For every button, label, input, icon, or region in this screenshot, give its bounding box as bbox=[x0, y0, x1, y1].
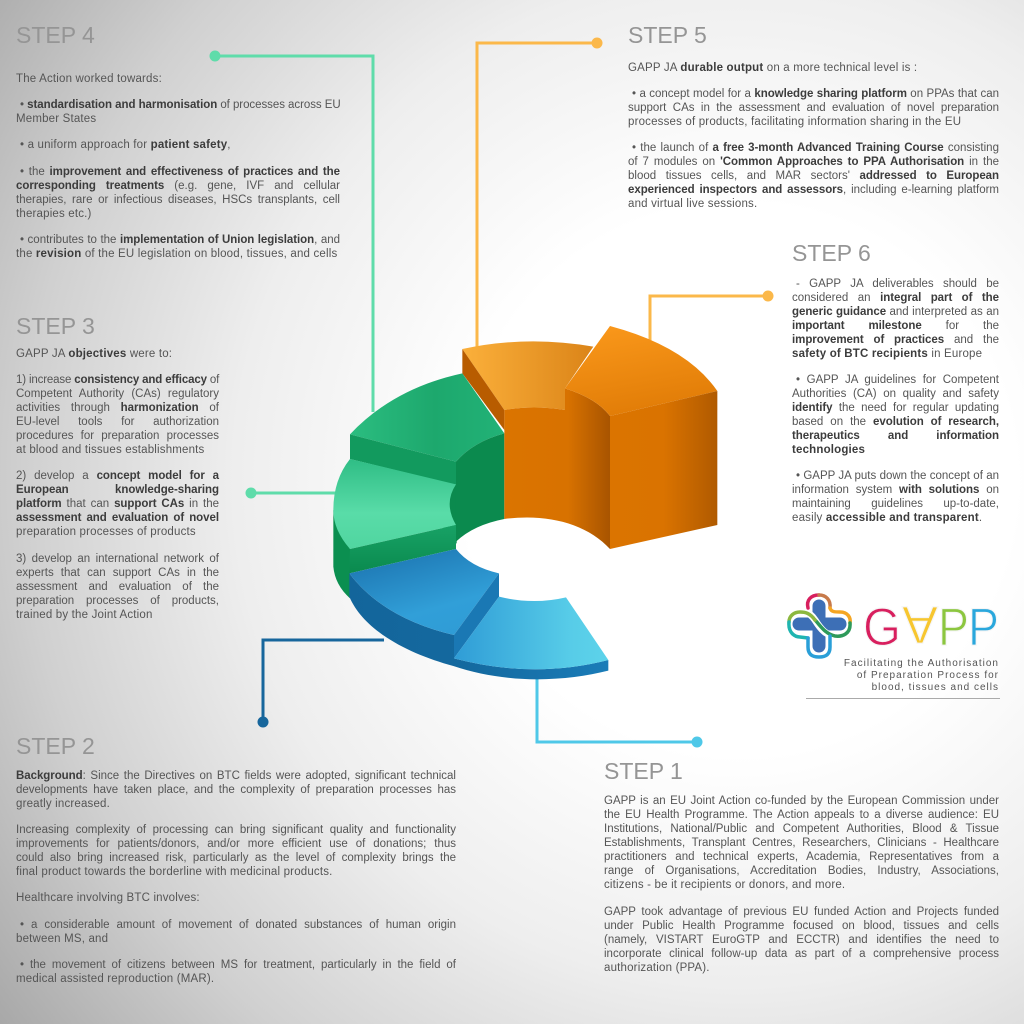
step 6 text: information system with solutions on bbox=[792, 484, 999, 496]
step 4 text: therapies etc.) bbox=[16, 208, 92, 220]
step 3 text: preparation processes of products bbox=[16, 526, 196, 538]
segment: step 6 orange bbox=[504, 326, 717, 549]
step 3 text: GAPP JA objectives were to: bbox=[16, 348, 172, 360]
step 6 text: • GAPP JA puts down the concept of an bbox=[796, 470, 999, 482]
step 3 text: experts that can support CAs in the bbox=[16, 567, 219, 579]
step 1 text: Establishments, Transplant Centres, Researchers, Clinicians - Healthcare bbox=[604, 837, 999, 849]
logo block bbox=[787, 593, 1000, 699]
step 6 text: important milestone for the bbox=[792, 320, 999, 332]
step 5 text: blood tissues cells, and MAR sectors' addressed to European bbox=[628, 170, 999, 182]
step 3 text: European knowledge-sharing bbox=[16, 484, 219, 496]
step 4 text: • the improvement and effectiveness of practices and the bbox=[20, 166, 340, 178]
tagline bbox=[844, 658, 999, 693]
connector: step 6 bbox=[650, 290, 774, 345]
step 4 text: • a uniform approach for patient safety, bbox=[20, 139, 231, 151]
step 3 text: 2) develop a concept model for a bbox=[16, 470, 219, 482]
tagline: blood, tissues and cells bbox=[872, 682, 999, 693]
step 3 text: platform that can support CAs in the bbox=[16, 498, 219, 510]
step 2 text: between MS, and bbox=[16, 933, 108, 945]
step 5 text: GAPP JA durable output on a more technical level is : bbox=[628, 62, 917, 74]
step 6 text: identify the need for regular updating bbox=[792, 402, 999, 414]
tagline: of Preparation Process for bbox=[857, 670, 999, 681]
segment: step 4 dark green bbox=[350, 373, 504, 543]
tagline: Facilitating the Authorisation bbox=[844, 658, 999, 669]
step 1 text bbox=[604, 795, 999, 974]
step 5 text: of 7 modules on 'Common Approaches to PPA Authorisation in the bbox=[628, 156, 999, 168]
wordmark bbox=[863, 595, 999, 657]
step 6 text: improvement of practices and the bbox=[792, 334, 999, 346]
step 3 text: EU-level tools for authorization bbox=[16, 416, 219, 428]
step 6 text: technologies bbox=[792, 444, 865, 456]
step 5 text: • the launch of a free 3-month Advanced Training Course consisting bbox=[632, 142, 999, 154]
step 4 text: the revision of the EU legislation on blood, tissues, and cells bbox=[16, 248, 337, 260]
step 5 heading: STEP 5 bbox=[628, 22, 707, 48]
step 6 text: easily accessible and transparent. bbox=[792, 512, 982, 524]
step 3 text: at blood and tissues establishments bbox=[16, 444, 204, 456]
step 2 text: Increasing complexity of processing can bring significant quality and functionality bbox=[16, 824, 456, 836]
step 1 text: incorporate clinical follow-up data as part of a comprehensive process bbox=[604, 948, 999, 960]
step 1 text: under Public Health Programme focused on blood, tissues and cells bbox=[604, 920, 999, 932]
step 4 text: • contributes to the implementation of Union legislation, and bbox=[20, 234, 340, 246]
step 6 text: Authorities (CA) on quality and safety bbox=[792, 388, 999, 400]
step 3 panel bbox=[16, 313, 220, 621]
logo mark and wordmark bbox=[787, 593, 999, 659]
step 1 text: range of Organisations, Accreditation Bodies, Industry, Associations, bbox=[604, 865, 999, 877]
step 3 text: procedures for preparation processes bbox=[16, 430, 219, 442]
step 4 text bbox=[16, 73, 341, 260]
step 4 panel bbox=[16, 22, 341, 260]
segment: step 1 light blue bbox=[454, 597, 608, 669]
step 2 text: improvements for patients/donors, and/or more efficient use of donations; thus bbox=[16, 838, 456, 850]
step 1 heading: STEP 1 bbox=[604, 758, 683, 784]
step 5 text: support CAs in the assessment and evaluation of novel preparation bbox=[628, 102, 999, 114]
step 1 text: citizens - be it recipients or donors, and more. bbox=[604, 879, 845, 891]
step 3 text: assessment and evaluation of the bbox=[16, 581, 219, 593]
step 1 text: Institutions, National/Public and Competent Authorities, Blood & Tissue bbox=[604, 823, 999, 835]
step 5 text bbox=[628, 62, 999, 210]
step 2 text: • the movement of citizens between MS for treatment, particularly in the field of bbox=[20, 959, 456, 971]
step 2 text bbox=[16, 770, 456, 985]
step 2 text: developments have taken place, and the complexity of preparation processes has bbox=[16, 784, 456, 796]
step 1 text: GAPP took advantage of previous EU funded Action and Projects funded bbox=[604, 906, 999, 918]
step 1 text: practitioners and technical experts, Academia, Representatives from a bbox=[604, 851, 999, 863]
icon: GAPP cross bbox=[789, 595, 850, 657]
step 4 text: therapies, rare or infectious diseases, HSCs transplants, cell bbox=[16, 194, 340, 206]
connector: step 5 bbox=[477, 38, 602, 348]
step 6 text: considered an integral part of the bbox=[792, 292, 999, 304]
step 3 text: assessment and evaluation of novel bbox=[16, 512, 219, 524]
step 6 text: generic guidance and interpreted as an bbox=[792, 306, 999, 318]
connector: step 3 bbox=[246, 488, 336, 498]
segment: step 5 yellow orange bbox=[462, 341, 593, 430]
step 3 text: trained by the Joint Action bbox=[16, 609, 153, 621]
step 6 text: • GAPP JA guidelines for Competent bbox=[796, 374, 999, 386]
wordmark: A bbox=[901, 595, 938, 654]
step 4 heading: STEP 4 bbox=[16, 22, 95, 48]
connector: step 4 bbox=[210, 50, 373, 412]
step 4 text: corresponding treatments (e.g. gene, IVF and cellular bbox=[16, 180, 340, 192]
step 5 text: experienced inspectors and assessors, including e-learning platform bbox=[628, 184, 999, 196]
step 6 text: - GAPP JA deliverables should be bbox=[796, 278, 999, 290]
step 6 heading: STEP 6 bbox=[792, 240, 871, 266]
segment: step 2 blue bbox=[349, 549, 608, 679]
step 2 text: could also bring increased risk, particularly as the level of complexity brings the bbox=[16, 852, 456, 864]
step 3 text: 1) increase consistency and efficacy of bbox=[16, 374, 219, 386]
step 3 text: activities through harmonization of bbox=[16, 402, 219, 414]
wordmark: G bbox=[863, 598, 901, 657]
step 2 text: • a considerable amount of movement of donated substances of human origin bbox=[20, 919, 456, 931]
segment: step 3 light green bbox=[333, 459, 456, 598]
step 6 text: safety of BTC recipients in Europe bbox=[792, 348, 982, 360]
connector: step 1 bbox=[537, 675, 702, 748]
step 1 text: (namely, VISTART EuroGTP and ECCTR) and identifies the need to bbox=[604, 934, 999, 946]
step 3 text bbox=[16, 348, 220, 621]
logo rule bbox=[806, 698, 1000, 699]
step 2 text: greatly increased. bbox=[16, 798, 110, 810]
step 4 text: Member States bbox=[16, 113, 96, 125]
step 3 text: preparation processes of products, bbox=[16, 595, 219, 607]
step 1 panel bbox=[604, 758, 999, 974]
step 3 heading: STEP 3 bbox=[16, 313, 95, 339]
step 2 text: Background: Since the Directives on BTC fields were adopted, significant technical bbox=[16, 770, 456, 782]
step 5 panel bbox=[628, 22, 999, 210]
step 5 text: processes of products, facilitating information sharing in the EU bbox=[628, 116, 961, 128]
step 2 text: final product towards the borderline with medicinal products. bbox=[16, 866, 333, 878]
step 6 text bbox=[792, 278, 999, 524]
connector: step 2 bbox=[258, 640, 384, 728]
step 6 text: maintaining guidelines up-to-date, bbox=[792, 498, 999, 510]
step 4 text: • standardisation and harmonisation of processes across EU bbox=[20, 99, 341, 111]
step 3 text: 3) develop an international network of bbox=[16, 553, 219, 565]
step 2 heading: STEP 2 bbox=[16, 733, 95, 759]
step 6 text: therapeutics and information bbox=[792, 430, 999, 442]
step 2 panel bbox=[16, 733, 456, 985]
step 6 text: based on the evolution of research, bbox=[792, 416, 999, 428]
step 2 text: medical assisted reproduction (MAR). bbox=[16, 973, 214, 985]
3D ring chart bbox=[333, 326, 717, 679]
step 1 text: authorization (PPA). bbox=[604, 962, 710, 974]
step 1 text: GAPP is an EU Joint Action co-funded by the European Commission under bbox=[604, 795, 999, 807]
step 1 text: the EU Health Programme. The Action appeals to a diverse audience: EU bbox=[604, 809, 999, 821]
step 5 text: and virtual live sessions. bbox=[628, 198, 757, 210]
step 2 text: Healthcare involving BTC involves: bbox=[16, 892, 200, 904]
step 5 text: • a concept model for a knowledge sharing platform on PPAs that can bbox=[632, 88, 999, 100]
wordmark: P bbox=[938, 598, 969, 657]
step 6 panel bbox=[792, 240, 999, 524]
step 4 text: The Action worked towards: bbox=[16, 73, 162, 85]
step 3 text: Competent Authority (CAs) regulatory bbox=[16, 388, 219, 400]
